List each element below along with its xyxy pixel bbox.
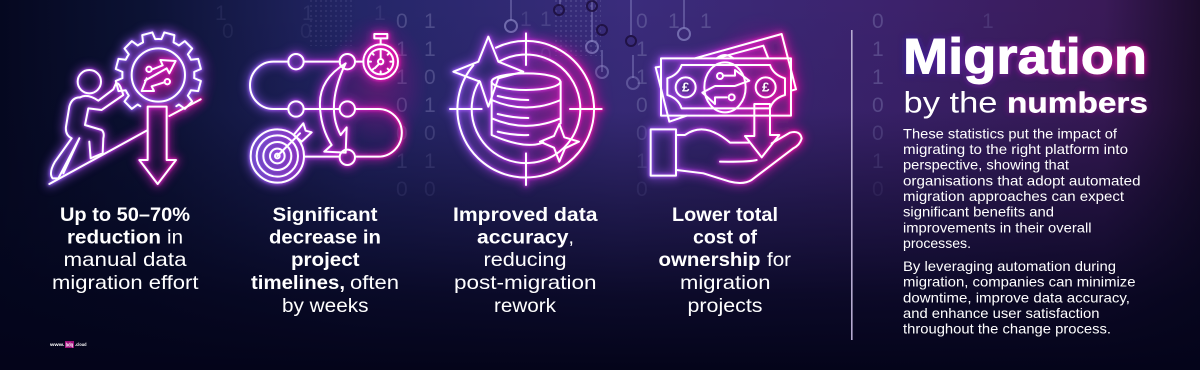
title: Migration [903,28,1147,84]
first paragraph: significant benefits and [903,205,1054,220]
pound signs: £ [762,80,770,95]
stat 2 text: decrease in [269,226,381,248]
title: numbers [1007,88,1148,120]
stat 4 text [658,204,792,317]
stat 3 text: accuracy [477,226,569,248]
stat 2 text: Significant [272,204,378,226]
second paragraph: By leveraging automation during [903,259,1116,274]
stat 4 text: cost of [693,226,758,248]
second paragraph: migration, companies can minimize [903,275,1136,290]
icon 2: shortened route with stopwatch and target [250,13,428,183]
binary digit pattern: 1 [668,10,680,33]
stat 2 text: timelines, [251,272,345,294]
second paragraph [903,259,1136,336]
icon 4: banknotes over open hand [651,13,815,183]
stat 1 text [52,204,199,294]
binary digit pattern: 1 [424,150,436,173]
stat 2 text: project [291,249,360,271]
icon 1: person pushing gear uphill [49,22,218,184]
stat 2 text: by weeks [282,295,369,317]
first paragraph: migrating to the right platform into [903,142,1128,157]
stat 2 text: often [350,272,399,294]
first paragraph: improvements in their overall [903,220,1092,235]
binary digit pattern: 1 [540,8,552,31]
stat 1 text: in [167,226,183,248]
first paragraph: perspective, showing that [903,158,1069,173]
pound signs: £ [682,80,690,95]
binary digit pattern: 1 [424,94,436,117]
first paragraph: These statistics put the impact of [903,126,1117,141]
stat 3 text [453,204,598,317]
title: by the [904,86,998,120]
binary digit pattern: 1 [636,150,648,173]
binary digit pattern: 1 [636,66,648,89]
stat 3 text: Improved data [453,204,598,226]
binary digit pattern: 1 [302,2,314,25]
first paragraph [903,126,1140,251]
binary digit pattern: 0 [540,44,552,67]
binary digit pattern: 0 [520,44,532,67]
binary digit pattern: 1 [872,66,884,89]
title: numbers [1007,88,1148,120]
binary digit pattern: 0 [872,10,884,33]
binary digit pattern: 0 [872,122,884,145]
stat 4 text: for [767,249,792,271]
binary digit pattern: 0 [424,66,436,89]
binary digit pattern: 0 [222,20,234,43]
binary digit pattern: 1 [872,150,884,173]
binary digit pattern: 1 [982,10,994,33]
binary digit pattern: 0 [424,122,436,145]
binary digit pattern: 1 [872,38,884,61]
binary digit pattern: 0 [396,94,408,117]
binary digit pattern: 1 [424,10,436,33]
binary digit pattern: 1 [700,10,712,33]
binary digit pattern: 0 [396,178,408,201]
stat 2 text [251,204,399,317]
stat 1 text: migration effort [52,272,199,294]
binary digit pattern: 0 [636,122,648,145]
binary digit pattern: 1 [520,8,532,31]
stat 3 text: reducing [484,249,566,271]
stat 4 text: Lower total [672,204,778,226]
binary digit pattern: 1 [636,38,648,61]
binary digit pattern: 0 [636,94,648,117]
binary digit pattern: 0 [872,178,884,201]
binary digit pattern: 1 [424,38,436,61]
pound signs [682,80,770,95]
logo: website address: .cloud [75,342,87,347]
binary digit pattern: 0 [636,10,648,33]
icon 3: database in crosshair with stars [450,27,613,185]
binary digit pattern: 0 [396,122,408,145]
second paragraph: downtime, improve data accuracy, [903,290,1130,305]
stat 3 text: , [568,226,574,248]
binary digit pattern: 1 [396,66,408,89]
logo: website address: bdq [66,342,73,348]
stat 1 text: Up to 50–70% [60,204,190,226]
first paragraph: organisations that adopt automated [903,173,1140,188]
stat 3 text: rework [494,295,556,317]
binary digit pattern: 1 [396,150,408,173]
stat 4 text: projects [688,295,763,317]
stat 4 text: ownership [658,249,761,271]
stat 1 text: reduction [67,226,161,248]
binary digit pattern: 0 [396,10,408,33]
title [903,28,1148,120]
stat 3 text: post-migration [454,272,596,294]
second paragraph: and enhance user satisfaction [903,306,1100,321]
title: Migration [903,28,1147,84]
circuit lines with nodes [505,0,690,89]
second paragraph: throughout the change process. [903,322,1111,336]
first paragraph: processes. [903,236,971,251]
stat 1 text: manual data [64,249,187,271]
binary digit pattern: 0 [636,178,648,201]
binary digit pattern: 0 [424,178,436,201]
binary digit pattern: 1 [215,2,227,25]
first paragraph: migration approaches can expect [903,189,1124,204]
binary digit pattern: 1 [374,2,386,25]
binary digit pattern [215,2,994,201]
stat 4 text: migration [680,272,770,294]
logo: website address [49,341,87,348]
binary digit pattern: 0 [300,20,312,43]
vertical divider [851,30,853,340]
binary digit pattern: 0 [872,94,884,117]
binary digit pattern: 1 [396,38,408,61]
logo: website address: www. [49,342,64,347]
